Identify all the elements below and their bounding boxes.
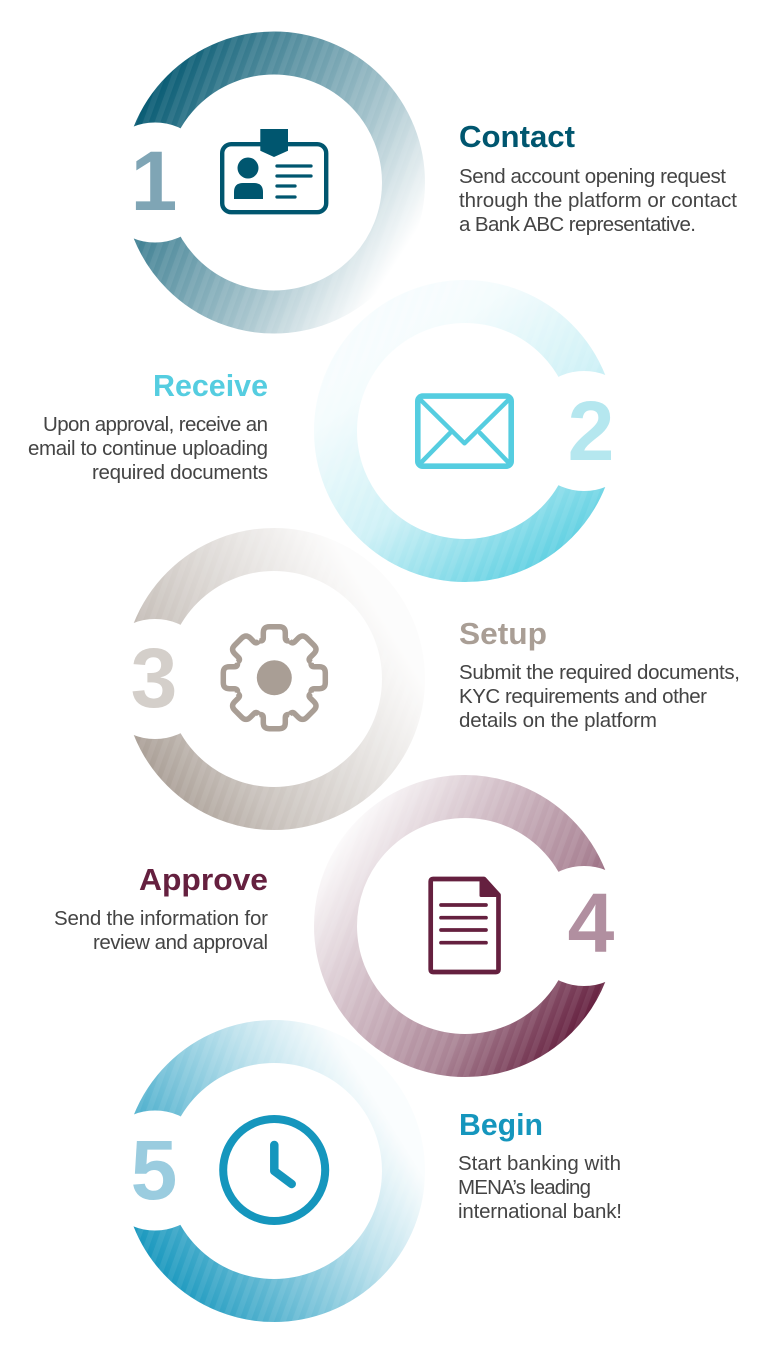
text: receive description [28, 413, 268, 484]
text: contact description: through the platform or contact [459, 189, 737, 212]
heading: setup: Setup [459, 616, 547, 651]
heading: contact: Contact [459, 119, 575, 154]
panel: step 2 receive [28, 302, 644, 560]
panel: step 5 begin [95, 1042, 622, 1300]
number 2: 2 [568, 384, 614, 478]
ring 5 [95, 1042, 404, 1300]
text: setup description: KYC requirements and other [459, 685, 707, 708]
text: begin description: MENA’s leading [458, 1176, 591, 1199]
text: receive description: Upon approval, receive an [43, 413, 268, 436]
text: contact description: Send account opening request [459, 165, 726, 188]
text: approve description: review and approval [93, 931, 268, 954]
text: setup description: Submit the required documents, [459, 661, 740, 684]
text: contact description: a Bank ABC representative. [459, 213, 696, 236]
ring 2 [336, 302, 644, 560]
heading: receive: Receive [153, 368, 268, 403]
text: approve description: Send the information for [54, 907, 268, 930]
panel: step 4 approve [54, 796, 644, 1056]
text: receive description: required documents [92, 461, 268, 484]
text: approve description [54, 907, 268, 954]
icon: document [431, 879, 498, 972]
number 4: 4 [568, 876, 615, 970]
panel: step 3 setup [95, 550, 740, 808]
number 1: 1 [131, 134, 177, 228]
text: begin description: international bank! [458, 1200, 622, 1223]
icon: id card [222, 129, 326, 212]
heading: approve: Approve [139, 862, 268, 897]
text: setup description: details on the platform [459, 709, 657, 732]
number 5: 5 [131, 1123, 177, 1217]
text: receive description: email to continue uploading [28, 437, 268, 460]
number 3: 3 [131, 631, 177, 725]
icon: gear [223, 627, 325, 729]
ring 4 [336, 796, 644, 1056]
text: setup description [459, 661, 740, 732]
ring 3 [95, 550, 404, 808]
ring 1 [95, 53, 404, 312]
text: begin description [458, 1152, 622, 1223]
text: begin description: Start banking with [458, 1152, 621, 1175]
panel: step 1 contact [95, 53, 737, 312]
heading: begin: Begin [459, 1107, 543, 1142]
text: contact description [459, 165, 737, 236]
icon: clock [223, 1119, 325, 1221]
icon: envelope [418, 396, 511, 466]
